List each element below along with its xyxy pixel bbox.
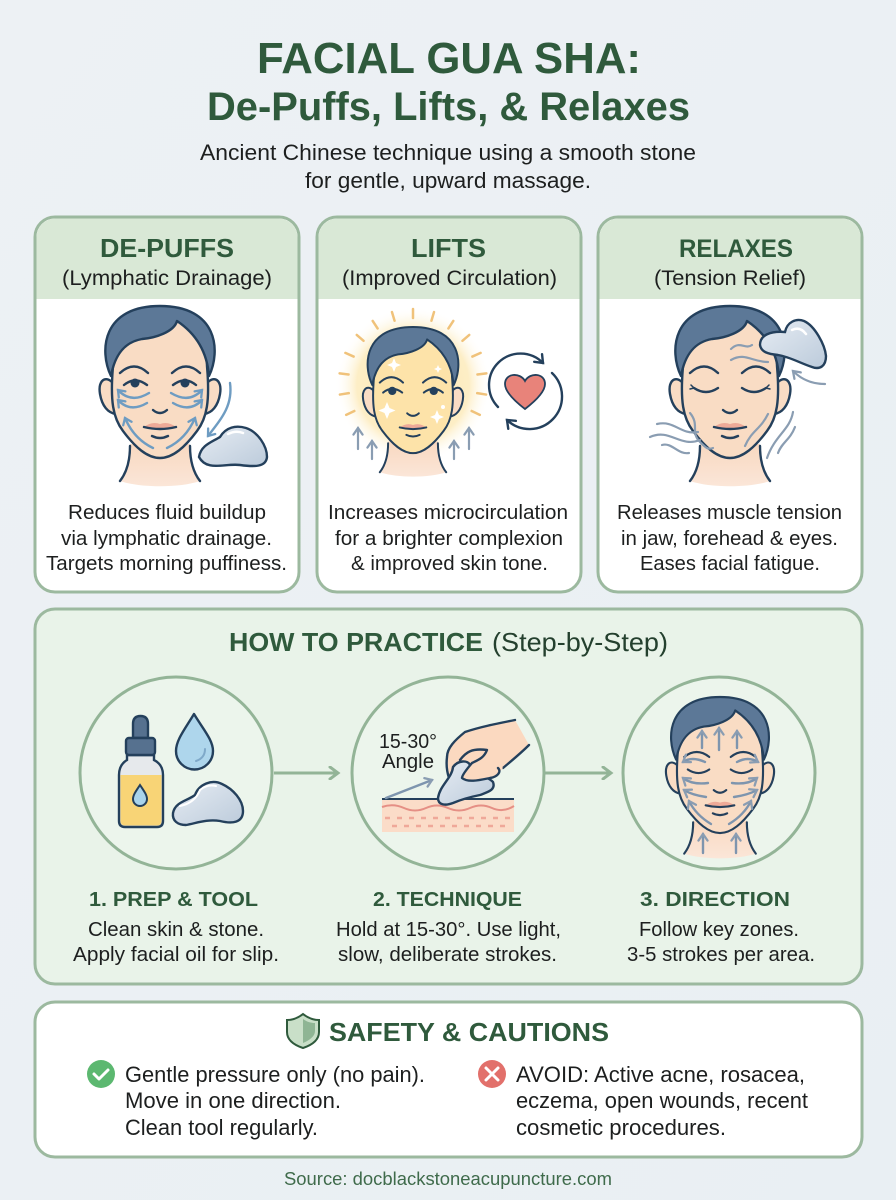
step 2 illustration xyxy=(352,677,544,869)
subheading: improved circulation: (Improved Circulation) xyxy=(342,266,557,290)
avoid list: cosmetic procedures. xyxy=(516,1115,726,1140)
step 2 text xyxy=(336,889,561,966)
title: FACIAL GUA SHA: xyxy=(257,34,641,83)
arrow: step 2 to 3 xyxy=(545,772,611,774)
icon: hand holding stone xyxy=(438,720,529,805)
do list: Clean tool regularly. xyxy=(125,1115,318,1140)
icon: cross xyxy=(478,1060,506,1088)
text: lifts description: Increases microcirculation xyxy=(328,502,568,524)
icon: shield xyxy=(287,1014,319,1048)
angle label xyxy=(379,731,437,773)
text: de-puffs description: Targets morning puffiness. xyxy=(46,553,287,575)
heading: relaxes: RELAXES xyxy=(679,235,793,263)
text: lifts description xyxy=(328,502,568,575)
panel: lifts xyxy=(317,217,581,592)
subtitle: for gentle, upward massage. xyxy=(305,168,591,193)
panel: relaxes xyxy=(598,217,862,592)
step 2 text: slow, deliberate strokes. xyxy=(338,944,557,966)
angle label: 15-30° xyxy=(379,731,437,753)
arrow: step 1 to 2 xyxy=(274,772,338,774)
step 1 text xyxy=(73,889,279,966)
text: relaxes description xyxy=(617,502,842,575)
icon: glowing face xyxy=(335,307,491,477)
step 1 text: Clean skin & stone. xyxy=(88,919,264,941)
text: relaxes description: in jaw, forehead & eyes. xyxy=(621,528,838,550)
step 1 text: 1. PREP & TOOL xyxy=(89,889,258,911)
heading: how to practice xyxy=(229,627,668,657)
text: relaxes description: Releases muscle tension xyxy=(617,502,842,524)
step 1 illustration xyxy=(80,677,272,869)
step 3 illustration xyxy=(623,677,815,869)
step 3 text: Follow key zones. xyxy=(639,919,799,941)
icon: heart with circulation arrows xyxy=(489,354,562,429)
source: Source: docblackstoneacupuncture.com xyxy=(284,1169,612,1189)
icon: face with direction arrows xyxy=(666,697,774,858)
avoid list xyxy=(478,1060,808,1140)
heading: how to practice: HOW TO PRACTICE xyxy=(229,627,483,657)
text: de-puffs description xyxy=(46,502,287,575)
avoid list: AVOID: Active acne, rosacea, xyxy=(516,1062,805,1087)
heading: safety and cautions: SAFETY & CAUTIONS xyxy=(329,1017,609,1047)
icon: face with drainage arrows xyxy=(100,306,267,486)
subheading: tension relief: (Tension Relief) xyxy=(654,266,806,290)
icon: check xyxy=(87,1060,115,1088)
subtitle xyxy=(200,140,696,193)
do list xyxy=(87,1060,425,1140)
heading: de-puffs: DE-PUFFS xyxy=(100,233,234,263)
panel: safety and cautions xyxy=(35,1002,862,1157)
title: De-Puffs, Lifts, & Relaxes xyxy=(207,85,690,129)
heading: lifts: LIFTS xyxy=(411,233,486,263)
title xyxy=(207,34,690,129)
subheading: lymphatic drainage: (Lymphatic Drainage) xyxy=(62,266,272,290)
step 1 text: Apply facial oil for slip. xyxy=(73,944,279,966)
step 3 text: 3. DIRECTION xyxy=(640,889,790,911)
text: lifts description: & improved skin tone. xyxy=(351,553,548,575)
text: de-puffs description: via lymphatic drainage. xyxy=(61,528,272,550)
do list: Move in one direction. xyxy=(125,1088,341,1113)
text: relaxes description: Eases facial fatigue. xyxy=(640,553,820,575)
icon: oil bottle xyxy=(119,716,163,827)
text: lifts description: for a brighter complexion xyxy=(335,528,563,550)
avoid list: eczema, open wounds, recent xyxy=(516,1088,808,1113)
step 3 text xyxy=(627,889,815,966)
step 2 text: Hold at 15-30°. Use light, xyxy=(336,919,561,941)
angle arrow xyxy=(386,780,432,798)
icon: gua sha stone xyxy=(173,782,243,825)
heading: how to practice: (Step-by-Step) xyxy=(492,627,668,657)
panel: de-puffs xyxy=(35,217,299,592)
text: de-puffs description: Reduces fluid buildup xyxy=(68,502,266,524)
panel: how to practice xyxy=(35,609,862,984)
angle label: Angle xyxy=(382,751,434,773)
step 3 text: 3-5 strokes per area. xyxy=(627,944,815,966)
subtitle: Ancient Chinese technique using a smooth stone xyxy=(200,140,696,165)
do list: Gentle pressure only (no pain). xyxy=(125,1062,425,1087)
skin cross-section xyxy=(382,799,514,832)
icon: relaxed face with stone xyxy=(650,306,826,486)
step 2 text: 2. TECHNIQUE xyxy=(373,889,522,911)
icon: water drop xyxy=(176,714,213,770)
